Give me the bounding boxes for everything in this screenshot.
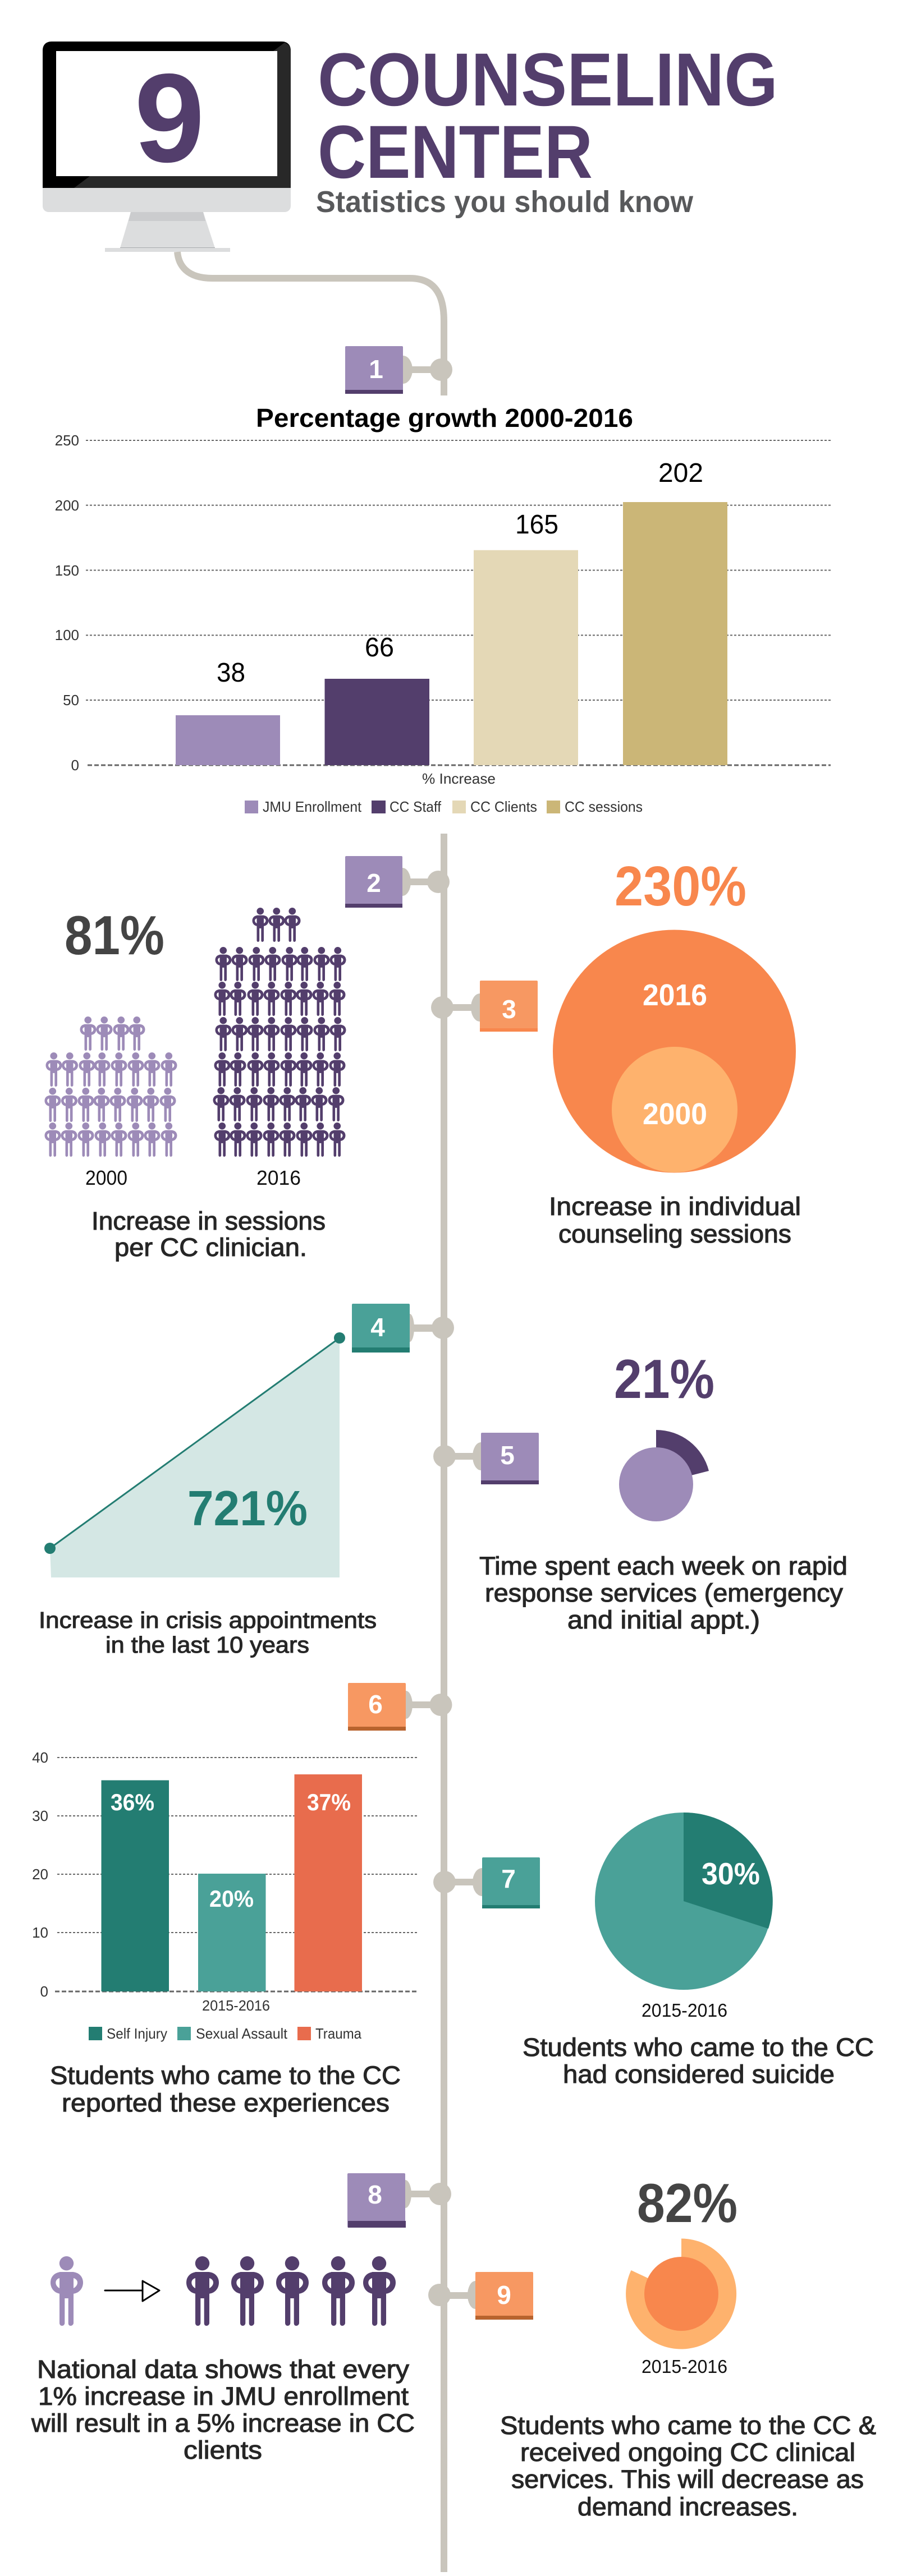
legend: CC sessions: [565, 798, 643, 815]
legend: JMU Enrollment: [263, 798, 362, 815]
tag 9: 9: [497, 2280, 511, 2310]
y axis labels: [55, 432, 79, 774]
y axis labels: 30: [32, 1807, 48, 1824]
y axis labels: 10: [32, 1924, 48, 1941]
y axis labels: 250: [55, 432, 79, 449]
tag 3: 3: [502, 995, 516, 1024]
tag 4: 4: [370, 1313, 385, 1342]
bar: CC staff: [324, 633, 429, 765]
cable from monitor to timeline: [177, 252, 444, 395]
caption: sessions per clinician: Increase in sessions: [91, 1207, 326, 1235]
caption: rapid response: response services (emergency: [485, 1579, 844, 1607]
legend: CC Clients: [470, 798, 537, 815]
y axis labels: 40: [32, 1749, 48, 1766]
y axis labels: 50: [63, 692, 79, 709]
tag 1: [345, 346, 452, 394]
row 4: [45, 1123, 177, 1157]
y axis labels: 0: [71, 757, 79, 774]
bar: sexual assault: 20%: [209, 1885, 254, 1912]
bar: CC sessions: [623, 458, 727, 765]
chart: 30 percent pie: [595, 1813, 773, 1990]
chart: nested circles: 2016: [643, 978, 707, 1012]
caption: ongoing services: [500, 2411, 876, 2521]
tag 2: [345, 856, 450, 908]
chart: crisis appointments area: [44, 1332, 345, 1577]
timeline line: [441, 834, 447, 2572]
tag 7: 7: [501, 1864, 516, 1893]
caption: rapid response: [479, 1552, 847, 1634]
tag 8: 8: [368, 2180, 382, 2209]
bar: self injury: [101, 1781, 169, 1991]
caption: national data: [31, 2355, 415, 2464]
icon: one light person: [51, 2256, 83, 2326]
bar: CC staff: 66: [365, 633, 394, 663]
y axis labels: 150: [55, 562, 79, 579]
caption: considered suicide: Students who came to the CC: [523, 2033, 874, 2062]
legend: Sexual Assault: [196, 2025, 288, 2042]
chart: 30 percent pie: 30%: [702, 1856, 760, 1891]
bar: JMU enrollment: 38: [217, 658, 245, 688]
caption: ongoing services: received ongoing CC clinical: [520, 2438, 855, 2467]
caption: reported experiences: reported these experiences: [62, 2089, 390, 2117]
row 1: [216, 947, 346, 981]
tag 4: [352, 1304, 454, 1353]
caption: rapid response: and initial appt.): [567, 1606, 760, 1634]
stat: 230 percent: 230%: [615, 855, 746, 918]
icon: monitor: [43, 42, 291, 252]
tag 8: [347, 2173, 451, 2228]
legend: Trauma: [315, 2025, 361, 2042]
chart: nested circles: 2000: [643, 1097, 707, 1131]
y axis labels: 0: [40, 1983, 48, 2000]
caption: crisis appointments: Increase in crisis appointments: [39, 1607, 377, 1633]
tag 5: 5: [500, 1441, 515, 1470]
subtitle: Statistics you should know: [316, 185, 694, 219]
top row: [253, 908, 301, 942]
y axis labels: 100: [55, 627, 79, 643]
title: [318, 38, 778, 194]
legend: [89, 2025, 361, 2042]
y axis labels: 20: [32, 1866, 48, 1883]
caption: national data: will result in a 5% increase in CC: [31, 2409, 415, 2437]
stat: 21 percent: 21%: [614, 1348, 714, 1410]
tag 6: [348, 1683, 452, 1731]
pictogram: 2016 clinician sessions: [213, 908, 346, 1157]
caption: crisis appointments: in the last 10 years: [106, 1632, 309, 1658]
caption: considered suicide: had considered suicide: [563, 2060, 835, 2089]
caption: rapid response: Time spent each week on rapid: [479, 1552, 847, 1580]
caption: ongoing services: Students who came to the CC &: [500, 2411, 876, 2440]
caption: sessions per clinician: per CC clinician.: [114, 1233, 307, 1262]
bar: CC clients: [474, 510, 578, 765]
chart: percentage growth: [55, 403, 831, 815]
tag 5: [433, 1433, 539, 1484]
caption: national data: clients: [184, 2436, 262, 2464]
year labels: 2000: [85, 1166, 127, 1189]
tag 1: 1: [369, 355, 383, 384]
bar: JMU enrollment: [176, 658, 280, 765]
big number nine: 9: [134, 47, 205, 188]
row 3: [45, 1088, 176, 1122]
title: COUNSELING: [318, 38, 778, 122]
bar: trauma: 37%: [307, 1789, 351, 1815]
caption: individual sessions: Increase in individual: [549, 1192, 801, 1221]
caption: national data: 1% increase in JMU enrollment: [38, 2382, 409, 2411]
year labels: 2016: [256, 1166, 301, 1189]
caption: ongoing services: demand increases.: [578, 2492, 798, 2521]
legend: [245, 798, 643, 815]
caption: national data: National data shows that every: [37, 2355, 410, 2384]
icon: five dark people: [186, 2256, 396, 2326]
tag 2: 2: [366, 868, 381, 898]
chart title: Percentage growth 2000-2016: [256, 403, 633, 433]
stat: 81 percent: 81%: [65, 904, 164, 966]
pie year label: 2015-2016: [642, 2356, 727, 2377]
row 2: [214, 982, 346, 1016]
bar: CC sessions: 202: [658, 458, 703, 488]
chart: crisis appointments area: 721%: [187, 1480, 308, 1536]
stat: 82 percent: 82%: [637, 2172, 737, 2234]
pie year label: 2015-2016: [642, 2000, 727, 2021]
caption: reported experiences: Students who came to the CC: [50, 2061, 401, 2090]
y axis labels: [32, 1749, 48, 2000]
caption: sessions per clinician: [91, 1207, 326, 1262]
bar: self injury: 36%: [111, 1789, 154, 1815]
caption: individual sessions: counseling sessions: [558, 1220, 791, 1248]
chart: nested circles: [553, 930, 796, 1172]
tag 7: [433, 1857, 540, 1908]
caption: ongoing services: services. This will decrease as: [511, 2465, 864, 2494]
tag 3: [431, 981, 538, 1032]
bar: CC clients: 165: [515, 510, 558, 540]
chart: reported experiences: [32, 1749, 417, 2042]
arrow: [105, 2281, 159, 2301]
row 2: [46, 1052, 177, 1087]
tag 9: [428, 2272, 533, 2320]
chart: 21 percent pie: [619, 1430, 709, 1521]
x axis label: 2015-2016: [202, 1997, 270, 2014]
y axis labels: 200: [55, 497, 79, 514]
caption: reported experiences: [50, 2061, 401, 2117]
row 4: [214, 1052, 346, 1087]
chart: 82 percent pie: [626, 2238, 736, 2349]
bar: trauma: [294, 1774, 362, 1991]
legend: CC Staff: [390, 798, 442, 815]
caption: individual sessions: [549, 1192, 801, 1248]
legend: Self Injury: [107, 2025, 167, 2042]
caption: considered suicide: [523, 2033, 874, 2089]
row 3: [216, 1017, 346, 1051]
bar: sexual assault: [198, 1874, 266, 1991]
row 1: [80, 1016, 145, 1051]
pictogram: 2000 clinician sessions: [45, 1016, 177, 1157]
tag 6: 6: [368, 1690, 383, 1719]
caption: crisis appointments: [39, 1607, 377, 1658]
row 6: [214, 1123, 346, 1157]
row 5: [213, 1087, 345, 1121]
x axis label: % Increase: [422, 770, 496, 787]
title: CENTER: [318, 111, 593, 194]
year labels: [85, 1166, 301, 1189]
